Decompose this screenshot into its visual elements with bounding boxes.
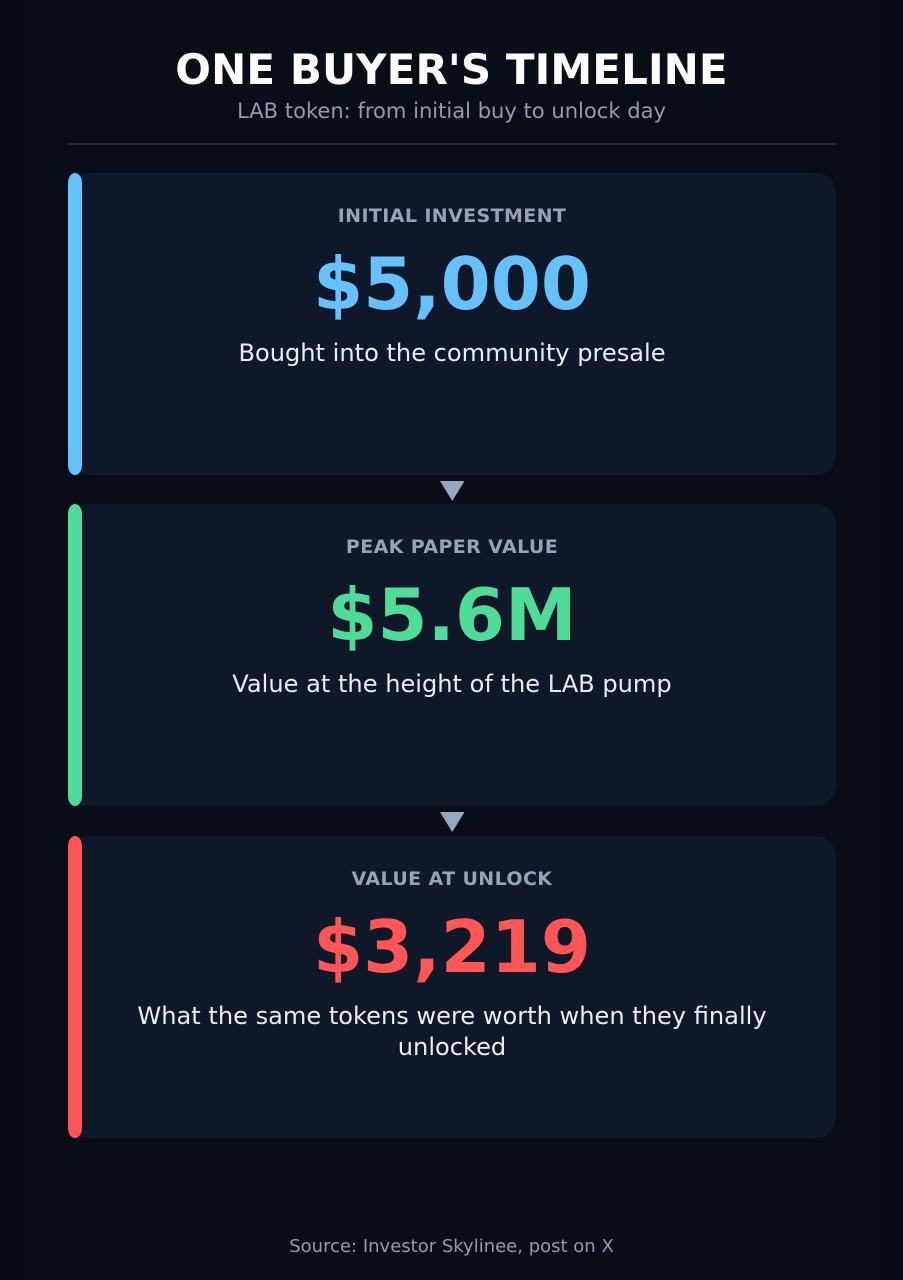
value: $5,000: $5,000 bbox=[313, 242, 591, 326]
label: initial investment: INITIAL INVESTMENT bbox=[338, 205, 566, 227]
accent bar red bbox=[68, 836, 82, 1138]
arrow down 1 bbox=[440, 481, 464, 501]
title: ONE BUYER'S TIMELINE bbox=[175, 45, 728, 94]
label: peak paper value: PEAK PAPER VALUE bbox=[346, 536, 558, 558]
header divider bbox=[68, 143, 836, 145]
accent bar blue bbox=[68, 173, 82, 475]
accent bar green bbox=[68, 504, 82, 806]
value: $5.6M: $5.6M bbox=[327, 573, 577, 657]
panel: peak paper value bbox=[68, 504, 836, 806]
panel: value at unlock bbox=[68, 836, 836, 1138]
source note: Source: Investor Skylinee, post on X bbox=[289, 1236, 614, 1257]
description: Bought into the community presale bbox=[238, 339, 666, 367]
arrow down 2 bbox=[440, 812, 464, 832]
panel: initial investment bbox=[68, 173, 836, 475]
description: What the same tokens were worth when they finally unlocked bbox=[137, 1002, 767, 1061]
value: $3,219: $3,219 bbox=[313, 905, 591, 989]
description: Value at the height of the LAB pump bbox=[232, 670, 672, 698]
label: value at unlock: VALUE AT UNLOCK bbox=[352, 868, 552, 890]
subtitle: LAB token: from initial buy to unlock day bbox=[237, 98, 666, 123]
